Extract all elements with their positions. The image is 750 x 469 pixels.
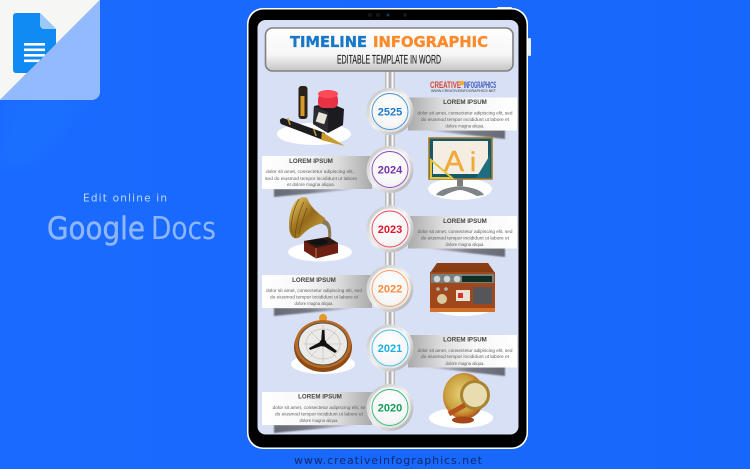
year node: 2525 [366, 88, 414, 135]
website url: www.creativeinfographics.net [294, 454, 483, 467]
folded corner with Google Docs icon [0, 0, 100, 100]
panel: 2020 text: LOREM IPSUM [298, 394, 342, 400]
panel: 2021 text [408, 335, 517, 376]
icon: monitor with AI: A [444, 146, 465, 178]
panel: 2021 text: do eiusmod tempor incididunt ut labore et [421, 354, 510, 360]
panel: 2021 text: dolore magna aliqua. [446, 361, 484, 367]
timeline spine [385, 70, 395, 395]
logo text: Google Docs [47, 211, 216, 247]
brand logo: WWW.CREATIVEINFOGRAPHICS.NET [431, 89, 497, 93]
title [290, 33, 488, 51]
panel: 2022 text: do eiusmod tempor incididunt ut labore et [270, 294, 359, 300]
panel: 2525 text [408, 98, 517, 139]
icon: pocket watch [291, 314, 355, 374]
logo text: Google Docs: Docs [151, 211, 216, 247]
panel: 2023 text: do eiusmod tempor incididunt ut labore et [421, 236, 510, 242]
header panel [266, 28, 513, 71]
icon: radio [430, 263, 495, 316]
year node: 2021 [366, 324, 414, 372]
year node: 2525: 2525 [378, 106, 402, 118]
panel: 2022 text [262, 275, 372, 316]
icon: document [13, 13, 56, 73]
panel: 2525 text: do eiusmod tempor incididunt ut labore et [421, 117, 510, 123]
year node: 2020 [366, 384, 414, 431]
icon: globe and magnifier [429, 373, 493, 428]
panel: 2022 text: LOREM IPSUM [292, 277, 336, 284]
icon: monitor with AI: i [470, 147, 476, 177]
panel: 2020 text: do eiusmod tempor incididunt ut labore et [275, 412, 364, 418]
year node: 2021: 2021 [378, 343, 402, 355]
panel: 2024 text: et dolore magna aliqua. [287, 182, 335, 188]
brand logo [430, 80, 497, 93]
year node: 2024 [366, 146, 414, 193]
panel: 2023 text [408, 216, 517, 257]
logo text: Google Docs: Google [47, 211, 145, 247]
camera [368, 13, 407, 17]
panel: 2024 text: dolor sit amet, consectetur adipiscing elit, [266, 169, 354, 175]
panel: 2023 text: LOREM IPSUM [443, 218, 487, 225]
panel: 2023 text: dolore magna aliqua. [446, 242, 484, 248]
panel: 2021 text: dolor sit amet, consectetur adipiscing elit, sed [418, 348, 513, 354]
subtitle: EDITABLE TEMPLATE IN WORD [337, 54, 441, 66]
panel: 2024 text: sed do eiusmod tempor incididunt ut labore [265, 176, 357, 182]
title: TIMELINE [290, 33, 367, 51]
title: INFOGRAPHIC [373, 33, 488, 51]
panel: 2020 text: dolore magna aliqua. [300, 418, 338, 424]
panel: 2022 text: dolor sit amet, consectetur adipiscing elit, sed [266, 288, 362, 294]
year node: 2022: 2022 [378, 284, 402, 296]
year node: 2023: 2023 [378, 224, 402, 236]
year node: 2023 [366, 206, 414, 252]
icon: monitor with AI [428, 138, 492, 200]
panel: 2525 text: dolore magna aliqua. [446, 124, 484, 130]
tablet buttons [497, 7, 531, 56]
year node: 2024: 2024 [378, 164, 403, 176]
panel: 2525 text: LOREM IPSUM [443, 99, 487, 106]
panel: 2024 text [262, 156, 372, 197]
text: Edit online in: Edit online in [83, 192, 167, 204]
year node: 2022 [366, 265, 414, 312]
panel: 2024 text: LOREM IPSUM [289, 158, 333, 165]
text: INFOGRAPHICS [464, 80, 496, 91]
panel: 2022 text: dolore magna aliqua. [294, 301, 334, 307]
panel: 2021 text: LOREM IPSUM [443, 336, 487, 344]
icon: fountain pen and ink [277, 86, 351, 146]
brand logo: CREATIVE [430, 80, 461, 91]
screen [258, 20, 518, 434]
panel: 2023 text: dolor sit amet, consectetur adipiscing elit, sed [418, 229, 513, 235]
icon: gramophone [288, 197, 352, 262]
panel: 2525 text: dolor sit amet, consectetur adipiscing elit, sed [418, 110, 513, 116]
year node: 2020: 2020 [378, 402, 402, 414]
panel: 2020 text: dolor sit amet, consectetur adipiscing elit, se [272, 405, 366, 411]
tablet [247, 7, 531, 449]
panel: 2020 text [262, 392, 372, 433]
